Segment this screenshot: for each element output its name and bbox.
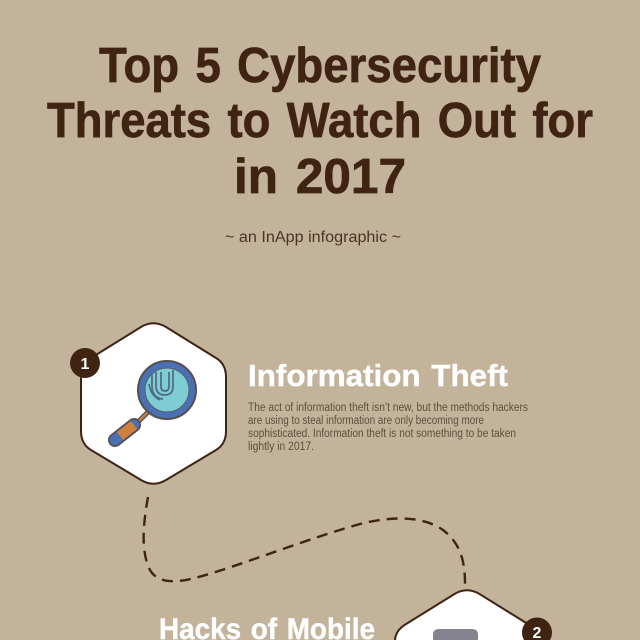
icon: magnifying glass with fingerprint [115,361,196,440]
number badge 1 [70,348,100,378]
heading: information theft: Information Theft [248,358,508,393]
subtitle: ~ an InApp infographic ~ [225,229,401,246]
hexagon 2 [395,590,539,640]
icon: phone [433,629,478,640]
body text: information theft [248,402,528,453]
number badge 2 [522,618,552,640]
hexagon 1 [81,323,226,484]
panel: hacks of mobile [159,590,552,640]
title [47,39,593,204]
body text: information theft: The act of information theft isn’t new, but the methods hackers [248,402,528,414]
body text: information theft: lightly in 2017. [248,441,314,453]
body text: information theft: are using to steal information are only becoming more [248,415,484,427]
title: in 2017 [234,150,406,204]
panel: information theft [70,323,528,484]
number badge 1: 1 [81,356,90,373]
title: Top 5 Cybersecurity [99,39,541,93]
body text: information theft: sophisticated. Information theft is not something to be taken [248,428,516,440]
dashed connector arrow [144,497,465,584]
title: Threats to Watch Out for [47,94,593,148]
